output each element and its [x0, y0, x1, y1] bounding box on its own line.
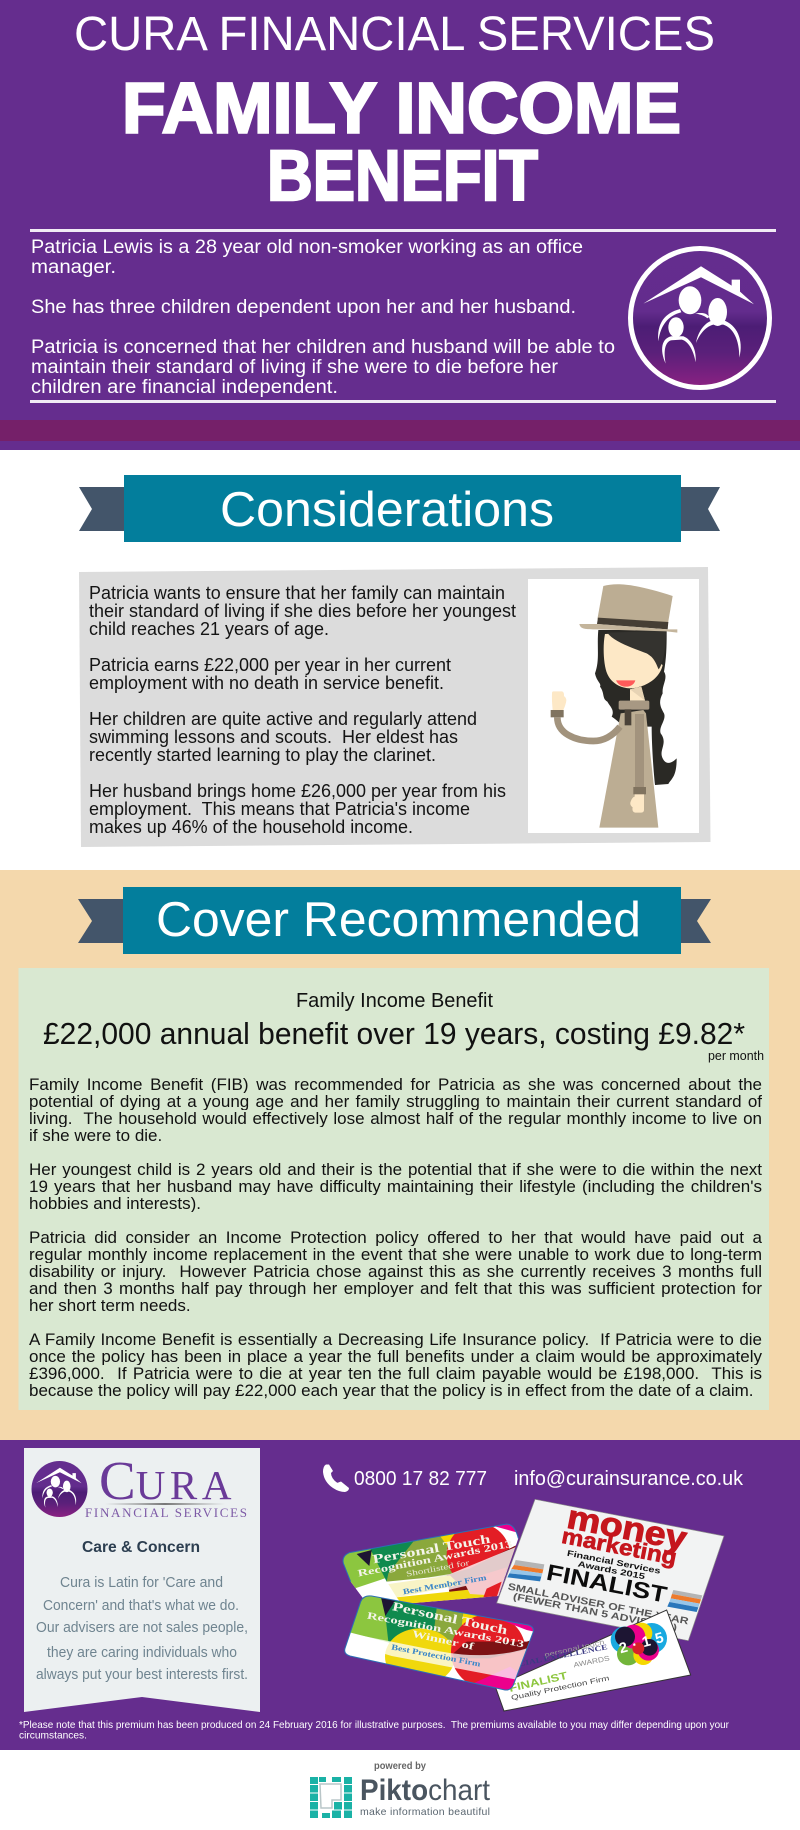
panel: footer	[0, 1440, 800, 1750]
caption: per month: per month	[708, 1049, 764, 1063]
text block: considerations: Patricia wants to ensure that her family can maintain	[89, 583, 505, 603]
award: Money Marketing finalist: FINALIST	[544, 1559, 669, 1608]
text block: Patricia introduction: Patricia Lewis is a 28 year old non-smoker working as an office	[31, 237, 583, 258]
heading ribbon: cover recommended	[78, 887, 711, 954]
text block: considerations: recently started learning to play the clarinet.	[89, 745, 436, 765]
title: family income benefit: FAMILY INCOME	[122, 70, 681, 148]
panel: cover recommended	[0, 870, 800, 1440]
award: Personal Touch financial excellence finalist: Quality Protection Firm	[511, 1675, 610, 1702]
footnote: premium disclaimer	[19, 1719, 729, 1742]
text block: Patricia introduction: maintain their standard of living if she were to die before her	[31, 357, 559, 378]
award: Personal Touch financial excellence finalist: FINANCIAL EXCELLENCE	[489, 1642, 608, 1674]
award: Money Marketing finalist: Awards 2015	[577, 1558, 646, 1581]
award: Money Marketing finalist: money	[564, 1499, 690, 1558]
heading ribbon: cover recommended: Cover Recommended	[156, 893, 641, 947]
award: Money Marketing finalist: SMALL ADVISER OF THE YEAR	[507, 1581, 689, 1627]
footnote: premium disclaimer: *Please note that this premium has been produced on 24 February 2016 for illustrative purposes. The premiums available to you may differ depending upon your	[19, 1719, 729, 1731]
icon: phone handset	[323, 1464, 349, 1492]
text block: why FIB recommended	[29, 1076, 762, 1144]
award: Personal Touch shortlisted: Shortlisted for	[405, 1558, 470, 1579]
awards group	[337, 1499, 724, 1711]
text block: considerations	[89, 583, 516, 837]
text block: considerations: Her children are quite active and regularly attend	[89, 709, 477, 729]
text block: Patricia introduction: manager.	[31, 257, 116, 278]
logo: Cura Financial Services	[32, 1450, 247, 1520]
banner: care and concern	[24, 1448, 260, 1712]
award: Personal Touch winner	[344, 1595, 534, 1690]
icon: Piktochart tiles	[310, 1777, 352, 1818]
award: Personal Touch financial excellence finalist	[489, 1610, 691, 1711]
text block: Patricia introduction: She has three children dependent upon her and her husband.	[31, 297, 576, 318]
key figure: annual benefit and cost: £22,000 annual benefit over 19 years, costing £9.82*	[43, 1016, 745, 1051]
branding: powered by Piktochart: powered by	[374, 1761, 426, 1772]
award: Personal Touch financial excellence finalist: 2·15	[618, 1630, 665, 1657]
text block: Patricia introduction	[31, 237, 615, 398]
award: Personal Touch shortlisted: Recognition Awards 2013	[357, 1539, 513, 1580]
award: Money Marketing finalist: marketing	[560, 1523, 679, 1570]
heading: care and concern: Care & Concern	[82, 1539, 200, 1556]
text block: considerations: Her husband brings home £26,000 per year from his	[89, 781, 506, 801]
logo: Cura Financial Services: FINANCIAL SERVICES	[85, 1505, 247, 1520]
text block: youngest child	[29, 1161, 762, 1212]
award: Personal Touch financial excellence finalist: AWARDS	[573, 1655, 611, 1669]
text block: considerations: employment. This means that Patricia's income	[89, 799, 470, 819]
icon: family under house roof	[630, 248, 770, 388]
text block: meaning of Cura	[36, 1575, 248, 1683]
text block: meaning of Cura: Cura is Latin for 'Care and	[60, 1575, 223, 1591]
award: Personal Touch winner: Recognition Awards 2013	[366, 1610, 525, 1650]
heading ribbon: considerations: Considerations	[220, 483, 554, 537]
text block: Patricia introduction: children are financial independent.	[31, 377, 338, 398]
footnote: premium disclaimer: circumstances.	[19, 1730, 87, 1742]
panel: considerations	[79, 475, 720, 847]
award: Personal Touch shortlisted	[342, 1524, 519, 1604]
text block: Patricia introduction: Patricia is concerned that her children and husband will be able to	[31, 337, 615, 358]
branding: powered by Piktochart	[310, 1761, 491, 1818]
award: Personal Touch shortlisted: Best Member Firm	[402, 1573, 488, 1596]
title: family income benefit	[122, 70, 681, 216]
logo: Cura Financial Services: CURA	[99, 1450, 236, 1511]
award: Personal Touch winner: Winner of	[411, 1629, 476, 1653]
text block: decreasing life insurance	[29, 1331, 762, 1399]
text block: meaning of Cura: always put your best interests first.	[36, 1667, 248, 1683]
text block: considerations: their standard of living if she dies before her youngest	[89, 601, 516, 621]
award: Personal Touch winner: Best Protection Firm	[391, 1642, 482, 1669]
title: company name: CURA FINANCIAL SERVICES	[74, 8, 715, 61]
text block: considerations: Patricia earns £22,000 per year in her current	[89, 655, 451, 675]
award: Personal Touch winner: Personal Touch	[391, 1599, 509, 1637]
text block: meaning of Cura: Our advisers are not sales people,	[36, 1620, 248, 1636]
text block: meaning of Cura: they are caring individuals who	[47, 1645, 237, 1661]
contact: phone number: 0800 17 82 777	[354, 1468, 487, 1490]
award: Money Marketing finalist	[497, 1499, 724, 1641]
text block: meaning of Cura: Concern' and that's what we do.	[43, 1598, 239, 1614]
contact: email: info@curainsurance.co.uk	[514, 1468, 744, 1490]
text block: considerations: makes up 46% of the household income.	[89, 817, 413, 837]
heading ribbon: considerations	[79, 475, 720, 542]
card: recommendation	[18, 968, 769, 1410]
award: Personal Touch financial excellence finalist: personal touch	[544, 1639, 605, 1659]
illustration: woman in hat and coat	[528, 579, 699, 833]
text block: considerations: child reaches 21 years of age.	[89, 619, 329, 639]
tagline: make information beautiful: make information beautiful	[360, 1806, 490, 1818]
panel: header	[0, 0, 800, 450]
award: Personal Touch shortlisted: Personal Touch	[371, 1532, 491, 1566]
text block: considerations: swimming lessons and scouts. Her eldest has	[89, 727, 458, 747]
award: Personal Touch financial excellence finalist: FINALIST	[508, 1670, 569, 1695]
award: Money Marketing finalist: Financial Services	[566, 1548, 662, 1576]
card: grey background	[79, 567, 710, 847]
wordmark: Piktochart: Piktochart	[360, 1774, 491, 1807]
text block: income protection	[29, 1229, 762, 1314]
text block: considerations: employment with no death in service benefit.	[89, 673, 444, 693]
subheading: product name: Family Income Benefit	[296, 990, 493, 1012]
title: family income benefit: BENEFIT	[267, 137, 538, 216]
award: Money Marketing finalist: (FEWER THAN 5 ADVISERS)	[512, 1591, 678, 1634]
